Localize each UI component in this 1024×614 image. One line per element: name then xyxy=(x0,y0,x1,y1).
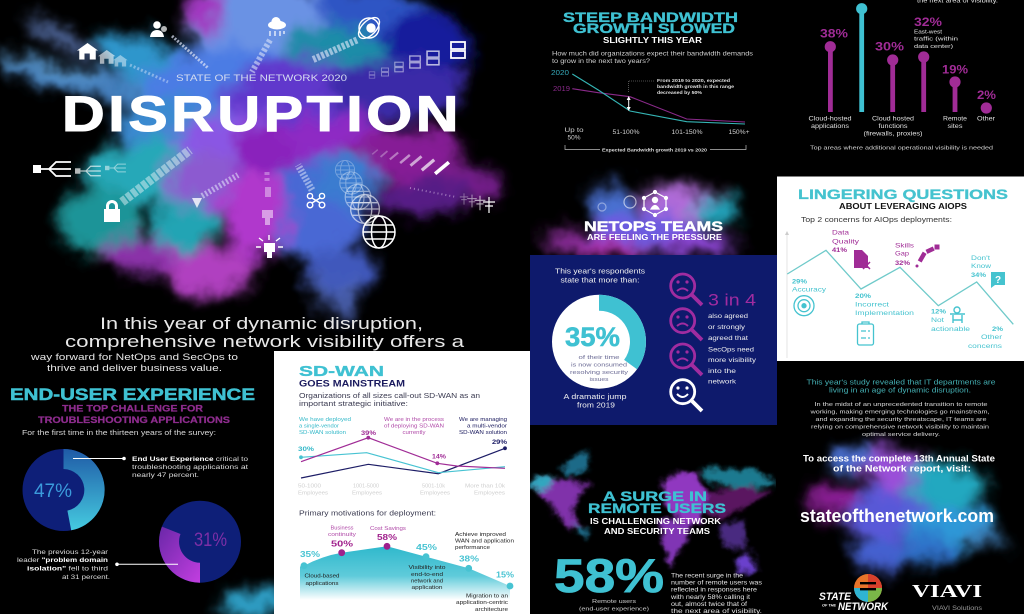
url: stateofthenetwork.com xyxy=(800,505,994,526)
icon: document error xyxy=(854,250,870,269)
callout 31 percent xyxy=(17,549,178,581)
intro line: Top 2 concerns for AIOps deployments: xyxy=(801,215,952,224)
subheading: TROUBLESHOOTING APPLICATIONS xyxy=(38,415,230,426)
subheading: ARE FEELING THE PRESSURE xyxy=(587,233,722,242)
area chart: motivations: application-centric xyxy=(456,600,508,606)
legend: single vendor: We have deployed xyxy=(299,417,351,423)
eyebrow: STATE OF THE NETWORK 2020 xyxy=(176,73,347,84)
area chart: motivations: continuity xyxy=(328,532,356,538)
area chart: motivations: 35% xyxy=(300,550,321,559)
heading: GROWTH SLOWED xyxy=(573,21,735,36)
legend: multi vendor: We are managing xyxy=(459,417,507,423)
line chart: sd-wan by company size: 29% xyxy=(492,439,507,446)
area chart: motivations: architecture xyxy=(475,607,508,613)
paragraph: out, almost twice that of xyxy=(671,601,747,608)
label: incorrect implementation: Implementation xyxy=(855,310,914,317)
callout 47 percent: nearly 47 percent. xyxy=(132,472,199,479)
donut 35 percent: issues xyxy=(590,377,609,383)
label: skills gap: Skills xyxy=(895,242,915,250)
annotation: decreased by 50% xyxy=(657,90,703,95)
logo: viavi xyxy=(912,581,982,612)
lollipop chart xyxy=(820,3,996,114)
powder cloud xyxy=(543,183,742,258)
bracket and caption xyxy=(565,145,746,152)
heading: NETOPS TEAMS xyxy=(584,218,723,234)
label: don't know: Know xyxy=(971,263,991,270)
panel background xyxy=(530,255,777,425)
donut 35 percent: 35% xyxy=(565,322,620,352)
label: incorrect implementation xyxy=(855,293,914,317)
lollipop chart: 38% xyxy=(820,28,848,40)
icon: sad magnifier 3 xyxy=(671,344,702,375)
lollipop chart: 30% xyxy=(875,42,904,54)
teal lead text: living in an age of dynamic disruption. xyxy=(829,386,971,394)
icon: target xyxy=(794,296,814,316)
legend: single vendor: SD-WAN solution xyxy=(299,430,346,436)
donut 47 percent xyxy=(22,449,105,531)
x axis labels: Employees xyxy=(474,490,505,496)
question: How much did organizations expect their bandwidth demands xyxy=(552,50,754,58)
x axis labels xyxy=(298,483,505,496)
x axis labels: More than 10k xyxy=(465,483,505,489)
area chart: motivations: Cloud-based xyxy=(304,574,340,580)
heading: SD-WAN xyxy=(299,363,384,380)
callout 31 percent: at 31 percent. xyxy=(62,574,110,581)
axis arrow xyxy=(785,231,789,358)
label: other concerns: Other xyxy=(981,334,1003,341)
label: data quality: Quality xyxy=(832,238,860,246)
area chart: motivations: Achieve improved xyxy=(455,532,506,538)
heading xyxy=(563,10,738,36)
icon: speech bubble question xyxy=(991,272,1005,288)
paragraph: In the midst of an unprecedented transition to remote xyxy=(814,402,988,408)
panel background xyxy=(777,176,1024,361)
lollipop chart: 32% xyxy=(914,17,942,29)
x labels: Up to xyxy=(564,127,584,134)
label: skills gap: Gap xyxy=(895,250,909,258)
subheading: AND SECURITY TEAMS xyxy=(604,527,711,536)
category labels xyxy=(808,117,995,138)
lollipop chart: 2% xyxy=(977,90,996,102)
world map xyxy=(530,452,777,574)
paragraph: optimal service delivery. xyxy=(862,432,940,438)
intro text xyxy=(555,266,645,284)
heading: END-USER EXPERIENCE xyxy=(10,386,255,404)
line chart: sd-wan by company size: 30% xyxy=(298,446,314,453)
line chart: sd-wan by company size: 14% xyxy=(432,454,446,461)
icon: lightbulb xyxy=(256,172,283,258)
x labels: 101-150% xyxy=(672,129,703,136)
east-west label xyxy=(914,30,958,50)
logo: state of the network: OF THE xyxy=(822,604,836,608)
area chart: motivations: Visibility into xyxy=(408,565,446,571)
donut 35 percent: resolving security xyxy=(570,370,628,376)
logo: viavi: VIAVI xyxy=(912,581,982,601)
x axis labels: 50-1000 xyxy=(298,483,321,489)
icon: scissors xyxy=(298,165,325,208)
annotation: From 2019 to 2020, expected xyxy=(657,78,730,83)
x labels xyxy=(564,127,750,142)
east-west label: traffic (within xyxy=(914,36,958,42)
category labels: sites xyxy=(948,124,962,130)
donut 35 percent xyxy=(552,295,646,389)
category labels: Cloud-hosted xyxy=(808,117,852,123)
stat label xyxy=(579,599,649,612)
legend: in process: We are in the process xyxy=(384,417,445,423)
label: not actionable xyxy=(931,308,970,333)
intro continuation: thrive and deliver business value. xyxy=(47,363,222,374)
area chart: motivations: 38% xyxy=(459,555,480,564)
stat description: network xyxy=(708,379,737,386)
icon: lock xyxy=(104,150,190,222)
subheading xyxy=(38,404,230,426)
callout 47 percent: troubleshooting applications at xyxy=(132,464,248,471)
panel: remote users xyxy=(530,452,777,614)
paragraph: reflected in responses here xyxy=(671,587,758,594)
panel: operational visibility xyxy=(808,0,998,152)
paragraph xyxy=(809,402,990,438)
icon: satellite xyxy=(372,149,450,175)
east-west label: data center) xyxy=(914,44,953,50)
panel: hero disruption xyxy=(0,0,502,351)
teal lead text: This year's study revealed that IT departments are xyxy=(806,378,996,386)
stat description: into the xyxy=(708,368,736,375)
intro continuation: way forward for NetOps and SecOps to xyxy=(30,352,238,363)
stat: 3 in 4: 3 in 4 xyxy=(708,291,756,310)
heading: STEEP BANDWIDTH xyxy=(563,10,738,25)
area chart: motivations: performance xyxy=(455,545,490,551)
paragraph: number of remote users was xyxy=(671,580,762,586)
legend: in process: of deploying SD-WAN xyxy=(384,424,444,430)
subheading xyxy=(590,517,721,536)
area chart: motivations: end-to-end xyxy=(411,572,443,578)
label: don't know xyxy=(971,255,991,279)
panel: conclusion xyxy=(800,378,1009,613)
stat description: SecOps need xyxy=(708,346,754,354)
legend: in process xyxy=(384,417,445,436)
call to action: To access the complete 13th Annual State xyxy=(803,454,995,464)
annotation: bandwidth growth in this range xyxy=(657,84,734,89)
callout 47 percent xyxy=(73,456,248,479)
icon: person desk xyxy=(950,307,965,323)
donut 47 percent: 47% xyxy=(34,481,72,502)
x labels: 50% xyxy=(568,134,581,142)
area chart: motivations: 45% xyxy=(416,543,438,552)
area chart: motivations: Migration to an xyxy=(466,593,508,599)
label: skills gap: 32% xyxy=(895,260,910,267)
icon: server trail xyxy=(369,42,465,78)
category labels: Cloud hosted xyxy=(872,117,914,123)
label: other concerns: concerns xyxy=(968,343,1003,350)
subheading: SLIGHTLY THIS YEAR xyxy=(603,36,702,45)
heading xyxy=(588,488,726,516)
intro text: state that more than: xyxy=(560,276,640,284)
powder cloud xyxy=(807,446,1009,571)
paragraph xyxy=(670,573,762,614)
legend: multi vendor: a multi-vendor xyxy=(467,424,507,430)
area chart: motivations: applications xyxy=(306,581,339,587)
legend: single vendor xyxy=(299,417,351,436)
logo: state of the network: NETWORK xyxy=(838,601,889,613)
label: not actionable: actionable xyxy=(931,326,970,333)
category labels: (firewalls, proxies) xyxy=(864,132,923,138)
caption: A dramatic jump xyxy=(564,392,626,401)
label: accuracy xyxy=(792,278,827,294)
category labels: applications xyxy=(811,124,849,130)
bracket and caption: Expected Bandwidth growth 2019 vs 2020 xyxy=(602,148,708,152)
question xyxy=(552,50,754,65)
question: to grow in the next two years? xyxy=(552,58,650,65)
stat: 58 percent: 58% xyxy=(554,549,664,602)
callout 31 percent: The previous 12-year xyxy=(32,549,109,556)
panel: end-user experience xyxy=(10,352,286,614)
area chart: motivations: application xyxy=(412,585,443,591)
icon: clipboard xyxy=(858,322,874,345)
legend: in process: currently xyxy=(402,430,426,436)
paragraph: working, making emerging technologies go mainstream, xyxy=(809,410,990,416)
label: skills gap xyxy=(895,242,915,267)
x axis labels: 5001-10k xyxy=(422,483,445,489)
logo: state of the network: STATE xyxy=(819,591,852,603)
icon: sad magnifier 2 xyxy=(671,309,702,340)
caption: from 2019 xyxy=(577,400,615,410)
legend: multi vendor xyxy=(459,417,507,436)
powder corner xyxy=(218,589,286,614)
caption: Top areas where additional operational visibility is needed xyxy=(810,146,993,152)
icon: globe xyxy=(335,160,395,248)
stat description xyxy=(708,313,757,386)
title: disruption: DISRUPTION xyxy=(62,86,462,142)
powder explosion xyxy=(0,0,502,320)
label: accuracy: Accuracy xyxy=(792,287,827,294)
call to action: of the Network report, visit: xyxy=(833,464,971,474)
subheading: IS CHALLENGING NETWORK xyxy=(590,517,721,526)
panel: netops banner xyxy=(543,183,742,258)
icon: usb xyxy=(33,162,126,176)
call to action xyxy=(803,454,995,474)
x axis labels: Employees xyxy=(298,490,328,496)
donut 31 percent: 31% xyxy=(194,530,227,551)
heading: REMOTE USERS xyxy=(588,500,726,516)
panel: security stats xyxy=(530,255,777,425)
label: incorrect implementation: 20% xyxy=(855,293,871,300)
area chart: motivations xyxy=(300,525,515,613)
x labels: 51-100% xyxy=(612,129,640,136)
area chart: motivations: WAN and application xyxy=(455,538,514,544)
category labels: Other xyxy=(977,117,995,123)
teal lead text xyxy=(806,378,996,394)
donut 31 percent xyxy=(159,501,241,583)
logo: viavi: VIAVI Solutions xyxy=(932,606,982,612)
stat label: Remote users xyxy=(592,599,636,605)
line chart: bandwidth xyxy=(551,70,745,124)
icon: network orbit xyxy=(312,14,383,60)
paragraph: with nearly 58% calling it xyxy=(670,594,750,601)
x axis labels: Employees xyxy=(352,490,382,496)
line chart: sd-wan by company size: 39% xyxy=(361,430,376,437)
legend: single vendor: a single-vendor xyxy=(299,424,339,430)
x labels: 150%+ xyxy=(728,129,750,136)
donut 35 percent: of their time xyxy=(578,355,620,361)
icon: network person xyxy=(598,190,668,216)
label: incorrect implementation: Incorrect xyxy=(855,302,889,309)
intro continuation xyxy=(30,352,238,374)
paragraph: The recent surge in the xyxy=(671,573,744,580)
paragraph: relying on comprehensive network visibility to maintain xyxy=(811,424,989,430)
label: don't know: Don't xyxy=(971,255,990,262)
heading: A SURGE IN xyxy=(603,488,707,504)
icon: home xyxy=(77,43,168,82)
subheading: GOES MAINSTREAM xyxy=(299,378,405,390)
motivations heading: Primary motivations for deployment: xyxy=(299,511,436,518)
stat description: or strongly xyxy=(708,324,746,331)
east-west label: East-west xyxy=(914,30,942,36)
label: data quality: 41% xyxy=(832,247,847,254)
panel: lingering questions xyxy=(777,176,1024,361)
x axis labels: 1001-5000 xyxy=(353,483,379,489)
label: accuracy: 29% xyxy=(792,278,807,286)
panel: sd-wan xyxy=(274,351,530,614)
line chart: aiops concerns xyxy=(787,250,1013,324)
icon: cloud xyxy=(252,17,286,72)
donut 35 percent: is now consumed xyxy=(571,362,627,368)
area chart: motivations: 50% xyxy=(331,540,354,549)
label: other concerns xyxy=(968,326,1003,350)
icon: user xyxy=(150,21,208,68)
panel background xyxy=(274,351,530,614)
stat description: agreed that xyxy=(708,335,748,342)
label: not actionable: 12% xyxy=(931,308,946,316)
description xyxy=(299,391,480,408)
logo: state of the network xyxy=(819,574,889,613)
label: data quality xyxy=(832,230,860,254)
icon: speech bubble question: ? xyxy=(995,275,1001,286)
callout 31 percent: leader "problem domain xyxy=(17,557,108,564)
icon: happy magnifier xyxy=(671,380,702,411)
description: important strategic initiative: xyxy=(299,399,408,408)
label: not actionable: Not xyxy=(931,317,944,324)
area chart: motivations: Business xyxy=(330,525,354,531)
description: Organizations of all sizes call-out SD-WAN as an xyxy=(299,391,480,400)
caption xyxy=(564,392,626,410)
category labels: Remote xyxy=(943,117,968,123)
icon: sad magnifier 1 xyxy=(671,274,702,305)
label: data quality: Data xyxy=(832,230,849,236)
intro line: For the first time in the thirteen years of the survey: xyxy=(22,428,216,437)
line chart: sd-wan by company size xyxy=(298,430,507,478)
area chart: motivations: Cost Savings xyxy=(370,526,406,532)
label: other concerns: 2% xyxy=(992,326,1003,333)
subheading: ABOUT LEVERAGING AIOPS xyxy=(839,202,968,211)
line chart: bandwidth: 2019 xyxy=(553,86,570,93)
subheading: THE TOP CHALLENGE FOR xyxy=(62,404,203,414)
stat description: more visibility xyxy=(708,357,757,364)
callout 31 percent: isolation" fell to third xyxy=(27,566,108,572)
x axis labels: Employees xyxy=(420,490,450,496)
annotation xyxy=(657,78,734,95)
intro text: In this year of dynamic disruption, xyxy=(100,314,423,333)
area chart: motivations: 15% xyxy=(496,571,515,580)
paragraph: and expanding the security threatscape, IT teams are xyxy=(816,417,986,423)
category labels: functions xyxy=(878,124,908,130)
stat label: (end-user experience) xyxy=(579,606,649,612)
intro text xyxy=(65,314,465,351)
icon: pencil xyxy=(916,244,940,268)
area chart: motivations: network and xyxy=(411,578,443,584)
intro text: comprehensive network visibility offers a xyxy=(65,332,465,351)
legend: multi vendor: SD-WAN solution xyxy=(459,430,507,436)
callout 47 percent: End User Experience critical to xyxy=(132,456,248,463)
stat description: also agreed xyxy=(708,313,748,320)
area chart: motivations: 58% xyxy=(377,533,398,542)
line chart: bandwidth: 2020 xyxy=(551,70,569,77)
intro text: This year's respondents xyxy=(555,266,645,276)
panel: bandwidth growth xyxy=(551,10,754,152)
lollipop chart: 19% xyxy=(942,64,968,76)
heading: LINGERING QUESTIONS xyxy=(798,187,1008,202)
icon: tower xyxy=(410,188,495,213)
icon: triangles trail xyxy=(192,175,238,208)
label: don't know: 34% xyxy=(971,272,986,279)
